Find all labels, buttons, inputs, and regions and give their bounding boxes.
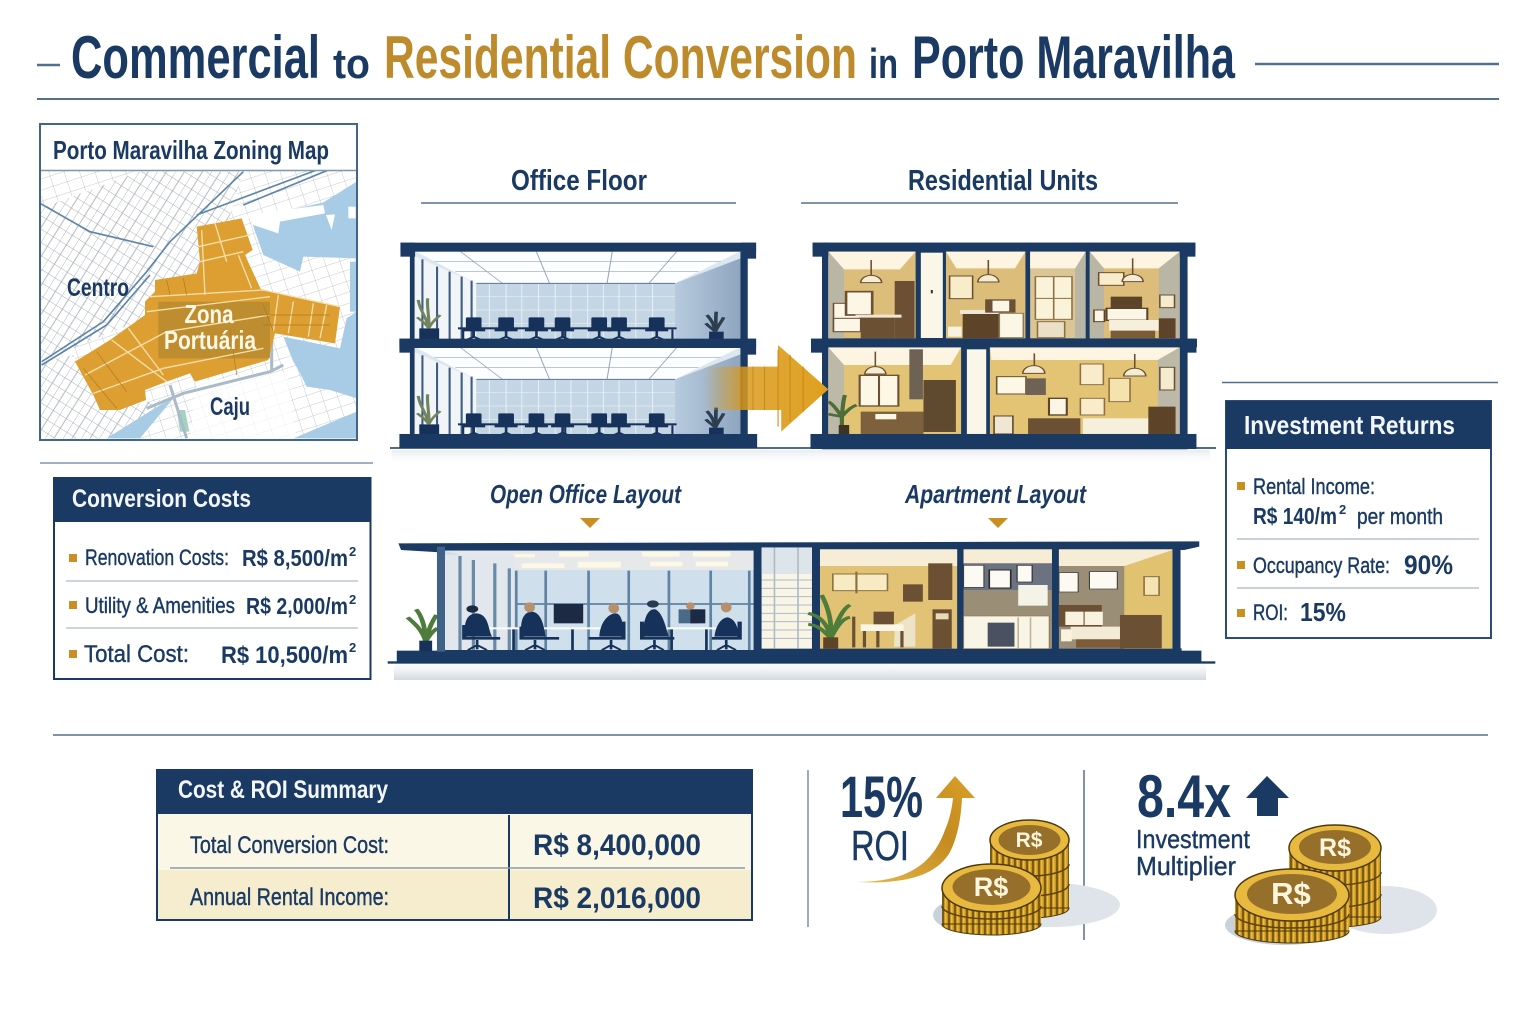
zone outline <box>75 218 340 410</box>
arrow: office to residential <box>704 345 828 432</box>
unit 3 <box>1030 252 1086 338</box>
table heading: Cost & ROI Summary <box>178 776 388 804</box>
icon: coin stack left: R$ <box>974 872 1008 902</box>
open office <box>445 551 754 650</box>
title: Residential Conversion <box>384 24 857 91</box>
row: renovation costs: R$ 8,500/m <box>242 545 348 571</box>
row: annual rental income <box>190 882 701 915</box>
icon: coin stack right: R$ <box>1319 834 1351 862</box>
heading: residential units: Residential Units <box>908 165 1098 197</box>
row: roi: 15% <box>1300 597 1346 627</box>
stat: 8.4x investment multiplier <box>1136 763 1251 881</box>
row: annual rental income: Annual Rental Income: <box>190 884 389 911</box>
unit 1 <box>828 252 916 338</box>
heading: conversion costs: Conversion Costs <box>72 485 251 513</box>
map title: Porto Maravilha Zoning Map <box>53 135 329 165</box>
row: occupancy rate <box>1237 550 1453 580</box>
stat: 15% ROI: 15% <box>840 765 923 830</box>
unit 4 <box>1090 252 1180 338</box>
icon: coin stack left <box>933 820 1120 935</box>
icon: coin stack right <box>1225 825 1437 945</box>
row: total conversion cost: R$ 8,400,000 <box>533 829 701 862</box>
table: cost and roi summary <box>157 770 752 920</box>
plant outside <box>407 609 437 651</box>
title: Commercial <box>71 24 320 91</box>
row: renovation costs <box>69 544 356 571</box>
illustration: residential units section <box>810 243 1197 449</box>
map label: Zona Portuaria <box>164 299 256 355</box>
icon: coin stack right: R$ <box>1271 876 1311 911</box>
panel: conversion costs <box>54 478 370 679</box>
row: utility and amenities: Utility & Amenities <box>85 593 235 618</box>
row: rental income: Rental Income: <box>1253 474 1375 499</box>
row: occupancy rate: 90% <box>1404 550 1453 580</box>
row: total cost: 2 <box>349 640 356 655</box>
stat: 8.4x investment multiplier: Investment <box>1136 824 1251 854</box>
row: occupancy rate: Occupancy Rate: <box>1253 553 1390 578</box>
row: total cost <box>69 640 356 669</box>
title <box>37 24 1499 99</box>
row: total conversion cost <box>190 829 701 862</box>
arrow: navy up <box>1246 776 1289 816</box>
unit 5 <box>828 347 961 434</box>
row: renovation costs: Renovation Costs: <box>85 545 229 570</box>
stat: 15% ROI: ROI <box>851 822 909 869</box>
apartment kitchen <box>964 549 1052 649</box>
panel: investment returns <box>1222 382 1498 638</box>
stat: 8.4x investment multiplier: 8.4x <box>1137 763 1231 830</box>
row: total conversion cost: Total Conversion Cost: <box>190 832 389 859</box>
label: apartment layout: Apartment Layout <box>904 479 1087 509</box>
unit 2 <box>946 252 1025 338</box>
row: total cost: Total Cost: <box>84 641 189 668</box>
apartment bedroom <box>1059 549 1172 649</box>
row: rental income: R$ 140/m <box>1253 503 1337 529</box>
stat: 8.4x investment multiplier: Multiplier <box>1136 851 1236 881</box>
row: utility and amenities <box>69 592 356 619</box>
stat: 15% ROI <box>840 765 923 869</box>
map label: Zona Portuaria: Portuária <box>164 325 256 355</box>
apartment living <box>808 549 957 649</box>
row: rental income: per month <box>1357 504 1443 529</box>
shaft <box>762 547 812 649</box>
icon: coin stack left: R$ <box>1016 829 1043 852</box>
panel: zoning map <box>40 124 357 440</box>
row: rental income: 2 <box>1339 502 1346 517</box>
row: utility and amenities: R$ 2,000/m <box>246 593 348 619</box>
row: roi <box>1237 597 1346 627</box>
unit 6 <box>990 347 1180 434</box>
room strip <box>921 253 986 434</box>
map label: Centro: Centro <box>67 274 129 302</box>
row: utility and amenities: 2 <box>349 592 356 607</box>
heading: investment returns: Investment Returns <box>1244 410 1455 440</box>
map label: Zona Portuaria: Zona <box>184 299 234 329</box>
arrow: curved gold up <box>856 776 975 882</box>
illustration: office floor section <box>399 243 757 448</box>
row: renovation costs: 2 <box>349 544 356 559</box>
row: roi: ROI: <box>1253 600 1288 625</box>
row: rental income <box>1237 474 1443 529</box>
title: in <box>869 40 898 87</box>
label: open office layout: Open Office Layout <box>490 479 682 509</box>
map label: Caju: Caju <box>210 393 250 421</box>
title: to <box>333 40 370 87</box>
label: apartment layout <box>904 479 1087 528</box>
heading: office floor: Office Floor <box>511 165 647 197</box>
illustration: floor plan conversion section <box>388 541 1215 664</box>
row: annual rental income: R$ 2,016,000 <box>533 882 701 915</box>
title: Porto Maravilha <box>912 24 1235 91</box>
label: open office layout <box>490 479 682 528</box>
row: total cost: R$ 10,500/m <box>221 642 348 669</box>
